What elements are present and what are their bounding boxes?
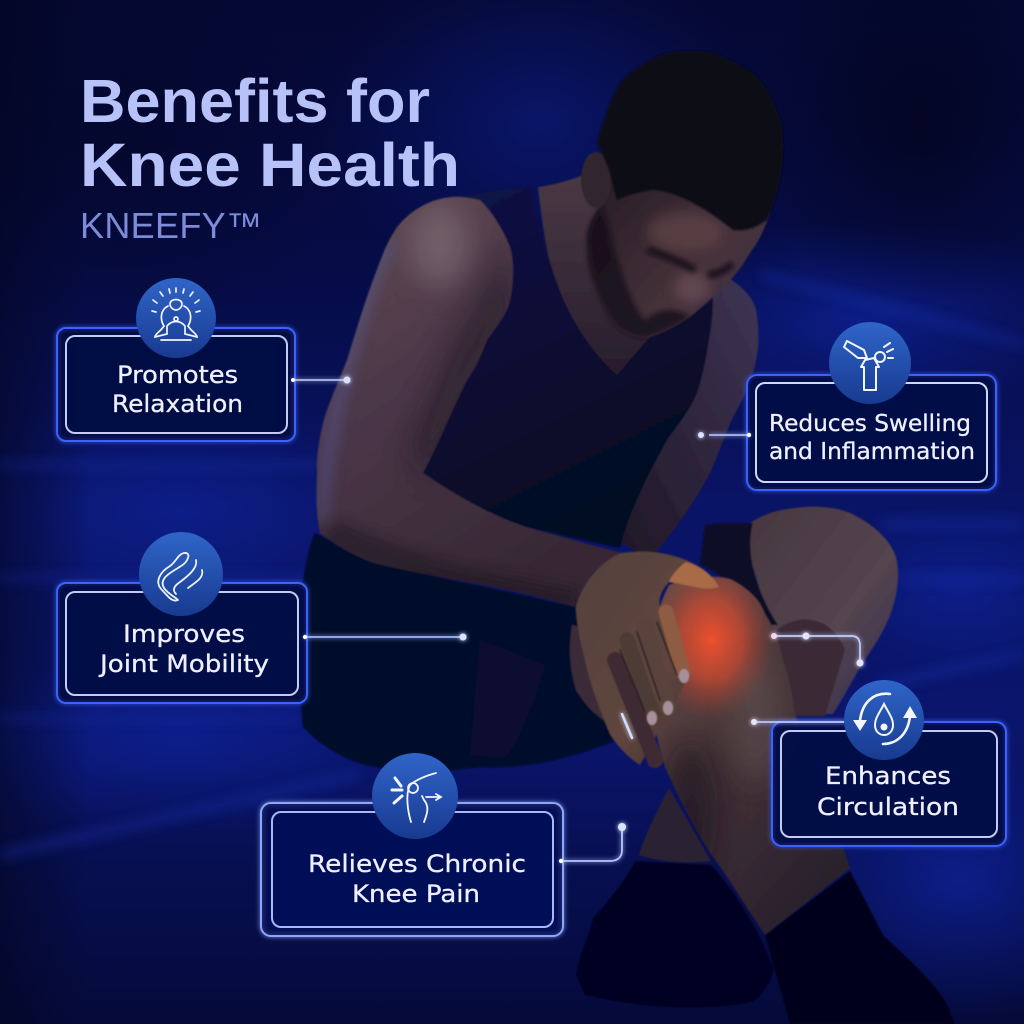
hand — [576, 552, 719, 765]
near arm — [316, 197, 622, 607]
tank top — [423, 187, 713, 548]
callout: enhances circulation — [751, 680, 1006, 846]
icon: flexible joint — [139, 532, 223, 616]
connector: knee to thigh — [771, 632, 864, 666]
ear — [581, 152, 611, 208]
callout: relieves chronic knee pain — [261, 753, 626, 936]
connector — [559, 823, 626, 863]
sock — [765, 871, 955, 1024]
callout: relieves chronic knee pain: Knee Pain — [352, 880, 480, 908]
shadow behind knee — [700, 523, 778, 625]
callout: enhances circulation: Circulation — [817, 793, 959, 821]
shorts and hips — [299, 533, 614, 771]
icon: joint with inflammation — [829, 322, 911, 404]
hair — [597, 51, 783, 231]
person with hurting knee — [299, 51, 955, 1024]
callout: enhances circulation: Enhances — [825, 762, 951, 790]
face — [587, 130, 770, 338]
callout: improves joint mobility — [57, 532, 466, 703]
title: Benefits for — [80, 67, 430, 135]
callout: promotes relaxation: Relaxation — [112, 390, 243, 418]
callout: promotes relaxation — [57, 278, 350, 441]
glow marker on fingers — [622, 714, 632, 738]
callout: improves joint mobility: Improves — [123, 620, 245, 648]
title — [80, 67, 460, 199]
connector — [303, 634, 466, 640]
beard and mouth — [587, 207, 690, 338]
title: Knee Health — [80, 131, 460, 199]
neck and chest — [538, 175, 660, 376]
icon: knee with pain arrows — [372, 753, 458, 839]
brand name: KNEEFY™ — [80, 205, 262, 246]
callout: relieves chronic knee pain: Relieves Chronic — [308, 850, 526, 878]
callout: improves joint mobility: Joint Mobility — [98, 650, 269, 678]
far arm — [610, 277, 758, 560]
connector — [291, 376, 350, 384]
calf behind hand — [570, 625, 640, 722]
lit thumb — [669, 562, 719, 589]
icon: meditating figure — [136, 278, 216, 358]
callout: reduces swelling and inflammation — [698, 322, 996, 490]
raised thigh — [740, 507, 898, 714]
connector — [698, 432, 751, 438]
icon: drop with circular arrows — [844, 680, 924, 760]
fingers — [615, 612, 683, 760]
back foot: shoe — [576, 861, 774, 1008]
callout: promotes relaxation: Promotes — [117, 361, 238, 389]
callout: reduces swelling and inflammation: Reduces Swelling — [769, 411, 971, 437]
connector — [751, 719, 845, 725]
shin and knee — [650, 577, 850, 935]
finger nails — [647, 669, 689, 725]
eyes shadow — [648, 250, 732, 275]
rear leg — [639, 788, 711, 862]
callout: reduces swelling and inflammation: and Inflammation — [769, 439, 975, 465]
